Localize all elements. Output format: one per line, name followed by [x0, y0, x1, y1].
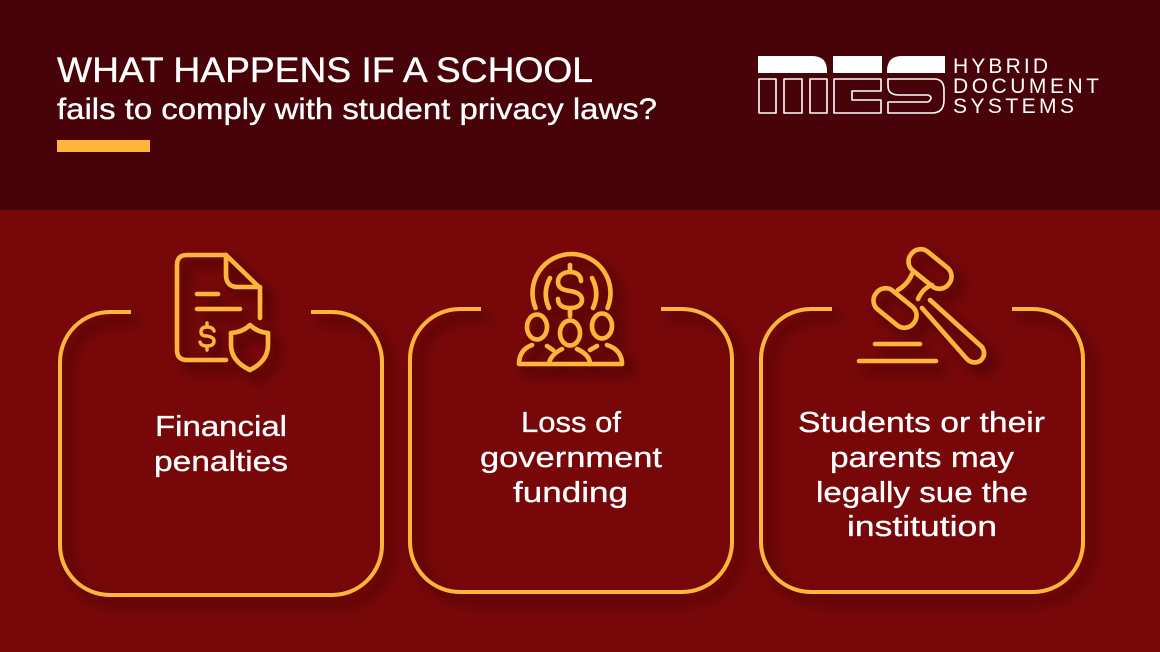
text: loss of government funding [480, 407, 662, 509]
title [57, 51, 657, 126]
header band [0, 0, 1160, 210]
logo: MES Hybrid Document Systems: SYSTEMS [953, 95, 1074, 118]
text: legal action: Students or their [798, 407, 1045, 439]
title: fails to comply with student privacy laws? [57, 93, 657, 126]
panel frame [60, 312, 382, 595]
logo: MES Hybrid Document Systems: DOCUMENT [953, 75, 1099, 98]
text: loss of government funding: Loss of [521, 407, 622, 439]
text: loss of government funding: funding [513, 477, 628, 509]
icon: document with dollar and shield [177, 255, 268, 370]
text: legal action: institution [847, 511, 997, 543]
panel frame [410, 309, 732, 592]
icon: gavel [859, 245, 984, 362]
text: legal action: parents may [830, 442, 1015, 474]
panel frame [761, 309, 1083, 592]
title: WHAT HAPPENS IF A SCHOOL [57, 51, 593, 90]
icon: people under dollar coin [519, 254, 622, 364]
text: legal action [798, 407, 1045, 543]
panel: financial penalties [60, 255, 382, 595]
panel: loss of government funding [410, 254, 732, 592]
text: financial penalties: Financial [155, 411, 287, 443]
text: loss of government funding: government [480, 442, 662, 474]
panel: legal action [761, 245, 1083, 592]
logo: MES Hybrid Document Systems: HYBRID [953, 55, 1048, 78]
text: financial penalties: penalties [154, 446, 288, 478]
text: financial penalties [154, 411, 288, 478]
title accent bar [57, 140, 150, 152]
text: legal action: legally sue the [816, 477, 1028, 509]
logo: MES Hybrid Document Systems [758, 55, 1099, 118]
